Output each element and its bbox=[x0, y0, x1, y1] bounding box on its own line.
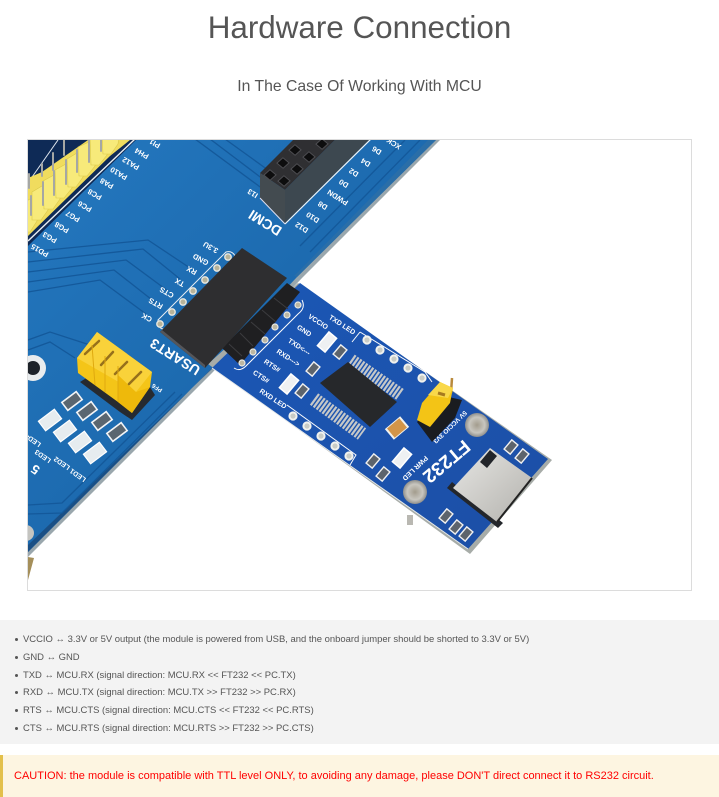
FT232 pin labels: CTS# bbox=[251, 370, 270, 385]
LEDs and resistors on MCU board: LED2 bbox=[53, 455, 72, 471]
pinout list panel bbox=[0, 620, 719, 744]
LEDs and resistors on MCU board bbox=[24, 392, 127, 483]
pin labels: PG7 bbox=[64, 209, 82, 224]
pin labels: PA10 bbox=[109, 165, 129, 182]
LEDs and resistors on MCU board: 5 bbox=[28, 461, 43, 478]
FT232 pin labels: GND bbox=[295, 324, 312, 339]
FT232 pin labels: FT232 bbox=[418, 435, 474, 487]
yellow jumpers on MCU board bbox=[77, 332, 164, 420]
pin labels: PC8 bbox=[86, 187, 103, 202]
USART3 labels: CK bbox=[139, 311, 154, 324]
DCMI labels: D12 bbox=[294, 220, 310, 235]
caution callout: CAUTION: the module is compatible with TTL level ONLY, to avoiding any damage, please DON'T direct connect it to RS232 circuit. bbox=[14, 770, 654, 782]
list bullets bbox=[15, 638, 18, 730]
product photo: FT232 module connected to MCU board bbox=[27, 139, 692, 591]
DCMI labels: D0 bbox=[337, 177, 350, 190]
DCMI labels: DCMI bbox=[246, 207, 284, 239]
MCU board bbox=[28, 139, 440, 580]
DCMI labels bbox=[246, 135, 403, 239]
USART3 labels: GND bbox=[191, 251, 210, 267]
USART3 header holes bbox=[157, 252, 236, 329]
pin labels bbox=[29, 137, 162, 259]
DCMI socket bbox=[260, 139, 371, 224]
pin labels: PC6 bbox=[76, 199, 93, 214]
DCMI labels: D2 bbox=[347, 166, 360, 179]
USART3 labels: 3.3U bbox=[202, 240, 220, 255]
USART3 labels: RTS bbox=[147, 296, 164, 311]
USART3 labels: CTS bbox=[158, 285, 175, 300]
header pad rows bbox=[287, 332, 432, 465]
screws bbox=[403, 413, 489, 525]
list item: GND: GND ↔ GND bbox=[23, 652, 80, 663]
pin labels: PI1 bbox=[148, 137, 162, 150]
mounting hole bbox=[28, 355, 46, 541]
list item: VCCIO: VCCIO ↔ 3.3V or 5V output (the module is powered from USB, and the onboard jumper should be shorted to 3.3V or 5V) bbox=[23, 634, 529, 645]
yellow jumpers on MCU board: PF6 bbox=[151, 381, 164, 393]
FT232 pin labels: RXD---> bbox=[275, 348, 300, 368]
DCMI labels: XCK bbox=[384, 135, 403, 151]
pin labels: PG3 bbox=[41, 230, 59, 245]
pin labels: PH4 bbox=[132, 145, 150, 161]
list item: CTS: CTS ↔ MCU.RTS (signal direction: MCU.RTS >> FT232 >> PC.CTS) bbox=[23, 723, 314, 734]
FT232 pin labels: TXD<--- bbox=[286, 338, 312, 358]
DCMI labels: D4 bbox=[359, 156, 372, 169]
FT232 chip bbox=[314, 360, 401, 434]
pin labels: PA12 bbox=[121, 155, 141, 172]
FT232 module board bbox=[208, 283, 552, 554]
FT232 pin labels: VCCIO bbox=[307, 313, 329, 332]
title: Hardware Connection bbox=[208, 10, 511, 45]
DCMI labels: D6 bbox=[370, 144, 383, 157]
pin labels: PD15 bbox=[29, 242, 50, 259]
PCB traces bbox=[28, 139, 420, 514]
USART3 labels: TX bbox=[173, 276, 186, 289]
DCMI labels: D8 bbox=[316, 199, 329, 212]
pin header: navy area with yellow pins bbox=[28, 140, 136, 246]
DCMI labels: PWDN bbox=[326, 188, 350, 207]
FT232 pin labels: 5V VCCIO 3V3 bbox=[431, 409, 468, 445]
FT232 jumper bbox=[417, 378, 462, 442]
LEDs and resistors on MCU board: LED1 bbox=[69, 467, 88, 483]
image frame bbox=[28, 140, 692, 590]
list item: RTS: RTS ↔ MCU.CTS (signal direction: MCU.CTS << FT232 << PC.RTS) bbox=[23, 705, 314, 716]
pin labels: PA8 bbox=[98, 176, 115, 191]
pin labels: PG8 bbox=[53, 220, 71, 235]
LEDs and resistors on MCU board: LED4 bbox=[24, 432, 43, 448]
subtitle: In The Case Of Working With MCU bbox=[237, 78, 482, 95]
USART3 labels: RX bbox=[185, 264, 198, 277]
DCMI labels: D10 bbox=[305, 210, 321, 225]
USART3 labels: USART3 bbox=[147, 335, 203, 379]
list item: TXD: TXD ↔ MCU.RX (signal direction: MCU.RX << FT232 << PC.TX) bbox=[23, 670, 296, 681]
USB-C connector bbox=[447, 448, 532, 528]
FT232 pin labels: RXD LED bbox=[258, 388, 288, 411]
FT232 pin labels bbox=[251, 313, 474, 487]
USART3 black pin header bbox=[160, 248, 303, 370]
tantalum capacitor bbox=[385, 416, 409, 440]
FT232 pin labels: TXD LED bbox=[327, 314, 356, 337]
FT232 pin labels: PWR LED bbox=[401, 454, 429, 481]
small SMD parts on FT232 bbox=[279, 332, 529, 541]
DCMI labels: I13 bbox=[246, 187, 260, 200]
FT232 pin labels: RTS# bbox=[262, 359, 281, 374]
USART3 labels bbox=[139, 240, 220, 379]
LEDs and resistors on MCU board: LED3 bbox=[34, 448, 53, 464]
caution callout bbox=[0, 755, 719, 797]
list item: RXD: RXD ↔ MCU.TX (signal direction: MCU.TX >> FT232 >> PC.RX) bbox=[23, 687, 296, 698]
